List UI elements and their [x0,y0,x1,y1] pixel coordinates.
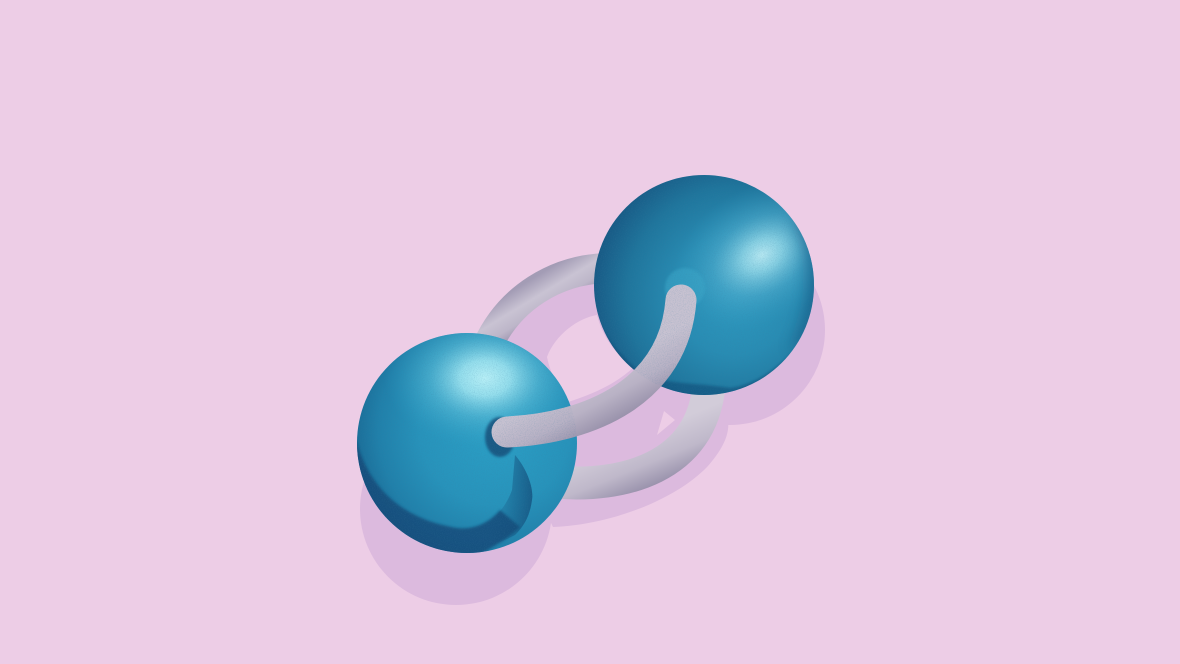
ring hole light area [547,315,634,402]
surface grain [357,175,814,553]
illustration: two blue atoms joined by a double bond [357,175,825,605]
atom: left sphere [357,333,577,553]
back ring: upper arc [488,268,606,345]
front bond [507,300,681,432]
atom: right sphere [594,175,814,395]
small light gap [657,411,675,435]
back ring: lower arc [555,385,709,483]
ground shadows [360,235,825,605]
